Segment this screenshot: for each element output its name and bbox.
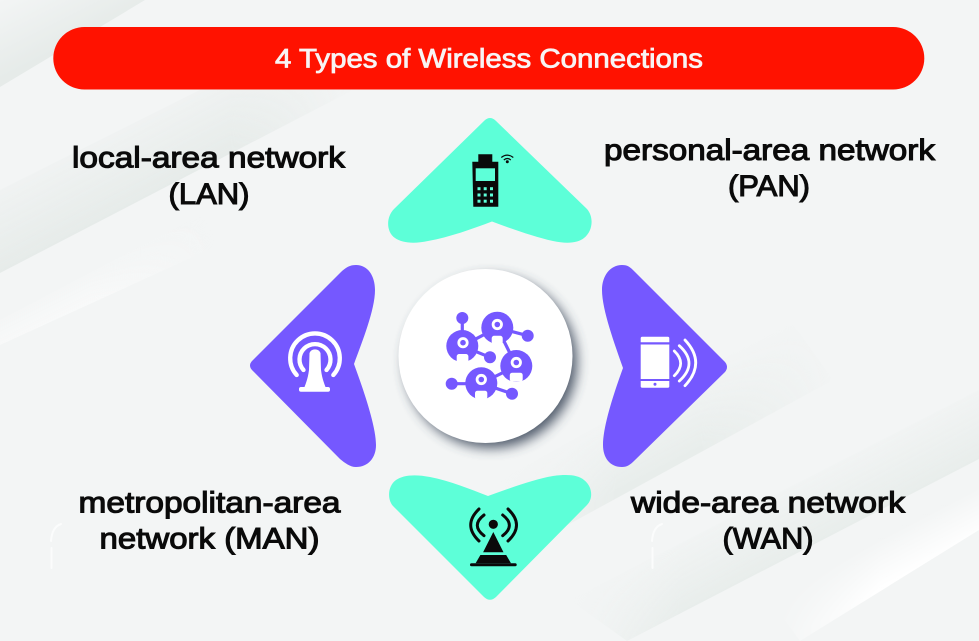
label: metropolitan-area network	[78, 486, 341, 556]
title text: 4 Types of Wireless Connections	[275, 43, 703, 73]
label: personal-area network: (PAN)	[728, 170, 810, 203]
label: wide-area network: wide-area network	[630, 486, 906, 520]
panel: bottom teal arrow	[389, 475, 591, 600]
label: personal-area network	[604, 134, 936, 203]
icon: connected people network	[446, 312, 534, 400]
icon: radio tower	[290, 333, 340, 392]
panel: center circle	[398, 269, 577, 448]
label: metropolitan-area network: metropolitan-area	[78, 486, 341, 520]
icon: broadcast antenna	[470, 509, 517, 566]
label: local-area network	[72, 142, 346, 211]
panel: right purple arrow	[602, 265, 727, 467]
panel: left purple arrow	[250, 265, 376, 467]
icon: phone with signal	[641, 337, 696, 388]
label: local-area network: (LAN)	[168, 178, 250, 211]
label: wide-area network	[630, 486, 906, 556]
label: personal-area network: personal-area network	[604, 134, 936, 167]
icon: card terminal with wifi	[472, 154, 513, 207]
panel: top teal arrow	[388, 118, 592, 243]
label: metropolitan-area network: network (MAN)	[100, 522, 320, 556]
title banner	[53, 27, 924, 90]
label: wide-area network: (WAN)	[722, 522, 814, 556]
label: local-area network: local-area network	[72, 142, 346, 174]
